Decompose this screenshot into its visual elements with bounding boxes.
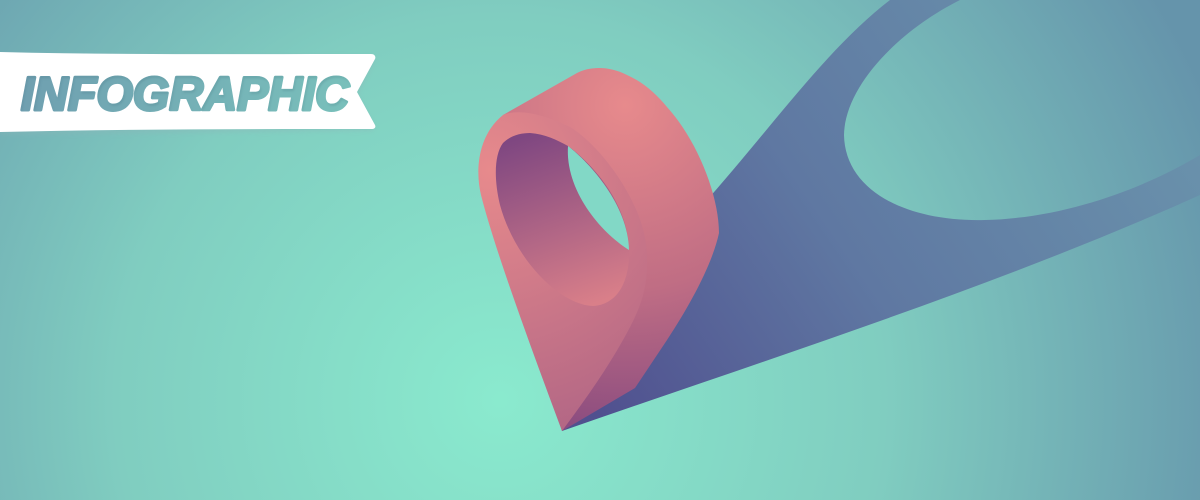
title: INFOGRAPHIC: INFOGRAPHIC [21,67,350,120]
view through the hole [568,146,629,250]
pin side wall [503,68,719,431]
pin front face [478,112,647,431]
ribbon shadow [0,54,375,135]
pin shadow [562,0,1200,431]
ribbon [0,52,375,132]
location pin [478,68,719,431]
pin hole inner wall [496,133,629,306]
